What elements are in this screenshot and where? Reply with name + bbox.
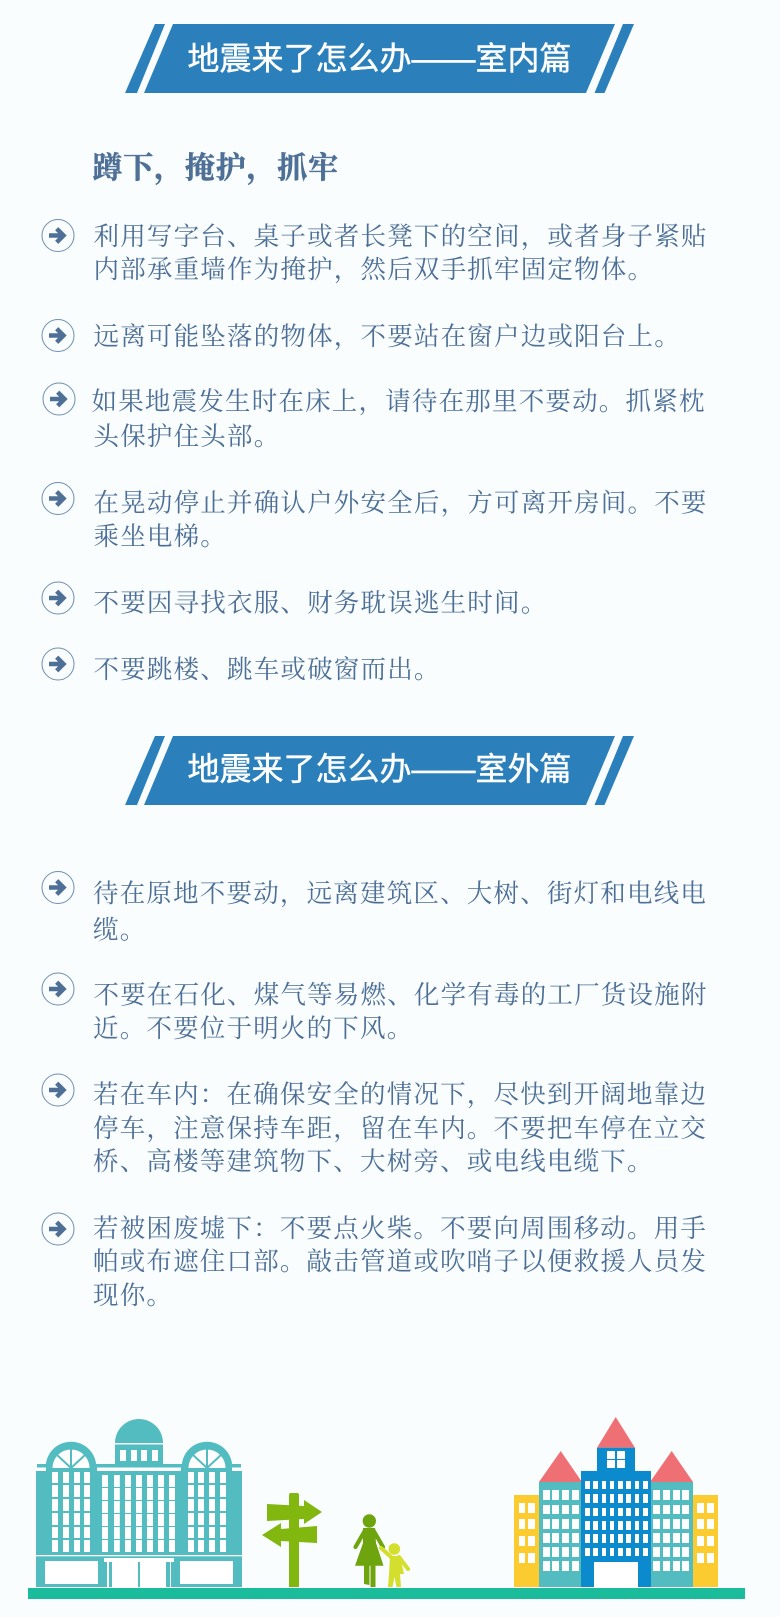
list item: outdoor 1: 缆。 <box>93 916 146 944</box>
list item: indoor 5: 不要因寻找衣服、财务耽误逃生时间。 <box>94 588 547 618</box>
list item: outdoor 2: 不要在石化、煤气等易燃、化学有毒的工厂货设施附 <box>94 980 708 1010</box>
list item: indoor 1: 利用写字台、桌子或者长凳下的空间，或者身子紧贴 <box>94 222 708 251</box>
list item: indoor 3: 头保护住头部。 <box>94 422 280 451</box>
list item: outdoor 4: 帕或布遮住口部。敲击管道或吹哨子以便救援人员发 <box>93 1247 707 1276</box>
list item: outdoor 1 <box>42 872 707 944</box>
list item: outdoor 4: 现你。 <box>93 1281 173 1310</box>
list item: outdoor 3: 桥、高楼等建筑物下、大树旁、或电线电缆下。 <box>93 1147 654 1176</box>
list item: indoor 4: 在晃动停止并确认户外安全后，方可离开房间。不要 <box>94 488 708 518</box>
list item: outdoor 3 <box>42 1074 707 1176</box>
list item: outdoor 3: 若在车内：在确保安全的情况下，尽快到开阔地靠边 <box>93 1080 707 1109</box>
illustration: mother <box>355 1514 384 1587</box>
list item: outdoor 3: 停车，注意保持车距，留在车内。不要把车停在立交 <box>93 1114 707 1143</box>
list item: indoor 2: 远离可能坠落的物体，不要站在窗户边或阳台上。 <box>94 322 681 351</box>
banner: indoor title: 地震来了怎么办——室内篇 <box>188 40 572 76</box>
list item: indoor 3: 如果地震发生时在床上，请待在那里不要动。抓紧枕 <box>92 387 706 416</box>
illustration: domed building <box>36 1419 242 1587</box>
illustration: ground strip <box>28 1588 745 1599</box>
heading: drop, cover, hold on: 蹲下，掩护，抓牢 <box>92 152 339 186</box>
list item: indoor 1: 内部承重墙作为掩护，然后双手抓牢固定物体。 <box>94 255 654 284</box>
illustration: city buildings <box>514 1417 718 1587</box>
list item: outdoor 2 <box>42 973 708 1043</box>
list item: outdoor 1: 待在原地不要动，远离建筑区、大树、街灯和电线电 <box>93 879 707 908</box>
list item: indoor 4 <box>42 482 708 551</box>
list item: indoor 4: 乘坐电梯。 <box>94 522 227 551</box>
list item: outdoor 4: 若被困废墟下：不要点火柴。不要向周围移动。用手 <box>93 1214 707 1243</box>
list item: indoor 1 <box>42 220 708 284</box>
list item: indoor 6: 不要跳楼、跳车或破窗而出。 <box>94 655 441 684</box>
list item: outdoor 2: 近。不要位于明火的下风。 <box>93 1014 413 1043</box>
banner: indoor title <box>125 24 634 93</box>
list item: indoor 3 <box>43 383 706 451</box>
illustration: signpost <box>262 1493 322 1587</box>
banner: outdoor title: 地震来了怎么办——室外篇 <box>188 751 572 787</box>
illustration: child <box>381 1543 408 1587</box>
banner: outdoor title <box>125 736 634 805</box>
list item: outdoor 4 <box>42 1213 707 1310</box>
